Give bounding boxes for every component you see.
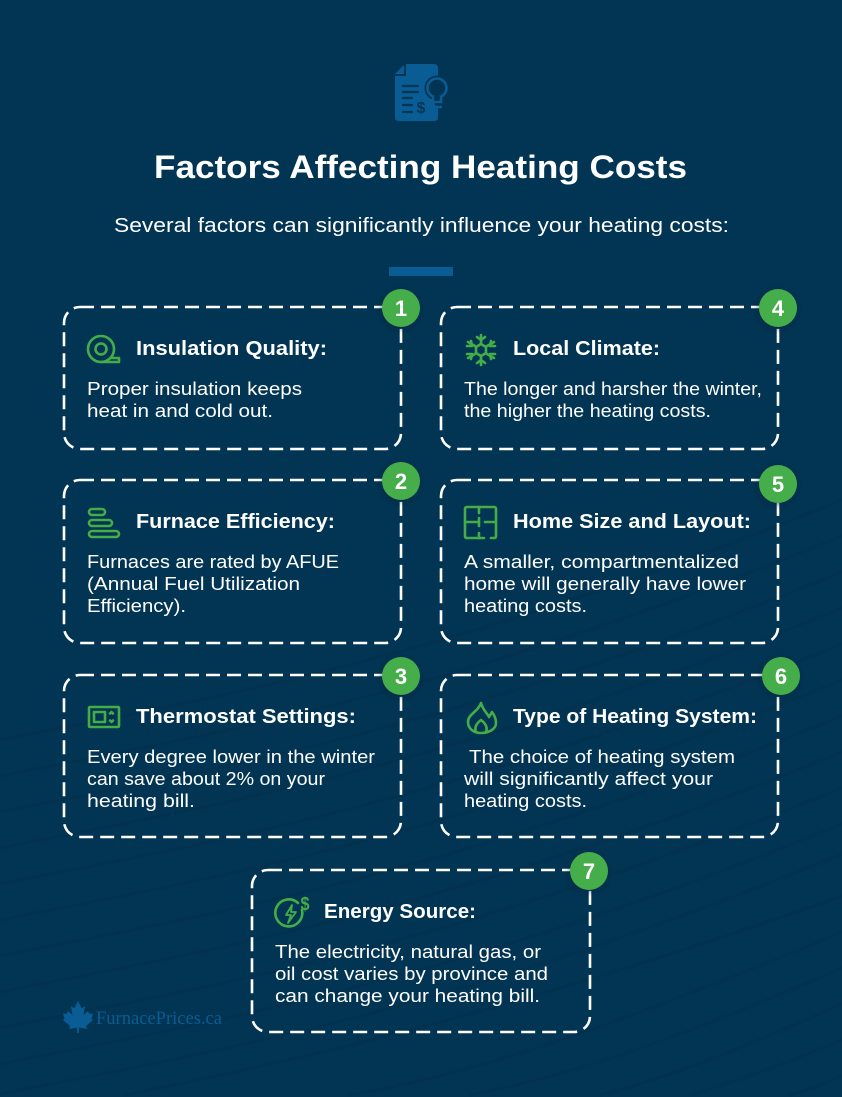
- panel: energy source: [252, 852, 608, 1032]
- number badge 6: 6: [775, 664, 787, 689]
- body: home size and layout: [464, 552, 746, 616]
- body: thermostat settings: [87, 747, 375, 811]
- body: furnace efficiency: (Annual Fuel Utilization: [87, 574, 300, 594]
- number badge 4: [759, 289, 797, 327]
- heading: furnace efficiency: Furnace Efficiency:: [136, 511, 335, 533]
- number badge 6: [762, 657, 800, 695]
- body: furnace efficiency: Furnaces are rated by AFUE: [87, 552, 339, 572]
- body: insulation quality: Proper insulation keeps: [87, 379, 302, 399]
- body: type of heating system: will significantly affect your: [463, 769, 713, 789]
- icon: furnace efficiency bars: [89, 509, 119, 537]
- body: local climate: [464, 379, 762, 421]
- logo: FurnacePrices.ca: [63, 1001, 223, 1033]
- icon: energy with dollar: [275, 894, 310, 926]
- body: insulation quality: [87, 379, 302, 421]
- panel: insulation quality: [64, 289, 420, 449]
- body: home size and layout: A smaller, compartmentalized: [464, 552, 739, 572]
- subtitle: Several factors can significantly influence your heating costs:: [114, 215, 729, 237]
- body: thermostat settings: can save about 2% on your: [87, 769, 325, 789]
- heading: thermostat settings: Thermostat Settings:: [136, 706, 356, 728]
- number badge 1: 1: [395, 296, 407, 321]
- body: energy source: oil cost varies by province and: [275, 964, 548, 984]
- icon: energy with dollar: $: [300, 894, 310, 914]
- panel: type of heating system: [441, 657, 800, 837]
- body: type of heating system: The choice of heating system: [469, 747, 735, 767]
- body: home size and layout: heating costs.: [464, 596, 587, 616]
- divider bar: [389, 267, 453, 276]
- body: thermostat settings: heating bill.: [87, 791, 195, 811]
- icon: flame: [468, 703, 496, 733]
- number badge 5: [759, 465, 797, 503]
- panel: home size and layout: [441, 465, 797, 643]
- heading: insulation quality: Insulation Quality:: [136, 338, 327, 360]
- heading: type of heating system: Type of Heating System:: [513, 706, 757, 728]
- panel: local climate: [441, 289, 797, 449]
- icon: snowflake: [467, 335, 495, 365]
- number badge 7: 7: [583, 859, 595, 884]
- icon: document with dollar sign and light bulb: [395, 64, 450, 121]
- number badge 7: [570, 852, 608, 890]
- number badge 5: 5: [772, 472, 784, 497]
- icon: thermostat: [89, 707, 119, 727]
- body: insulation quality: heat in and cold out.: [87, 401, 273, 421]
- icon: maple leaf: [63, 1001, 93, 1033]
- number badge 3: 3: [395, 664, 407, 689]
- body: thermostat settings: Every degree lower in the winter: [87, 747, 375, 767]
- body: energy source: can change your heating bill.: [275, 986, 540, 1006]
- number badge 3: [382, 657, 420, 695]
- heading: home size and layout: Home Size and Layout:: [513, 511, 751, 533]
- body: home size and layout: home will generally have lower: [464, 574, 746, 594]
- body: energy source: The electricity, natural gas, or: [275, 942, 541, 962]
- heading: local climate: Local Climate:: [513, 338, 660, 360]
- body: type of heating system: [463, 747, 735, 811]
- title: Factors Affecting Heating Costs: [154, 149, 687, 185]
- body: furnace efficiency: Efficiency).: [87, 596, 186, 616]
- panel: furnace efficiency: [64, 462, 420, 643]
- heading: energy source: Energy Source:: [324, 901, 476, 923]
- body: furnace efficiency: [87, 552, 339, 616]
- body: local climate: The longer and harsher the winter,: [464, 379, 762, 399]
- number badge 2: [382, 462, 420, 500]
- number badge 2: 2: [395, 469, 407, 494]
- body: type of heating system: heating costs.: [464, 791, 587, 811]
- icon: document with dollar sign and light bulb: $: [417, 100, 426, 117]
- logo: FurnacePrices.ca: FurnacePrices.ca: [96, 1008, 223, 1029]
- icon: insulation roll: [88, 336, 119, 362]
- icon: floor plan: [465, 507, 496, 538]
- panel: thermostat settings: [64, 657, 420, 837]
- number badge 1: [382, 289, 420, 327]
- body: energy source: [275, 942, 548, 1006]
- body: local climate: the higher the heating costs.: [464, 401, 711, 421]
- number badge 4: 4: [772, 296, 785, 321]
